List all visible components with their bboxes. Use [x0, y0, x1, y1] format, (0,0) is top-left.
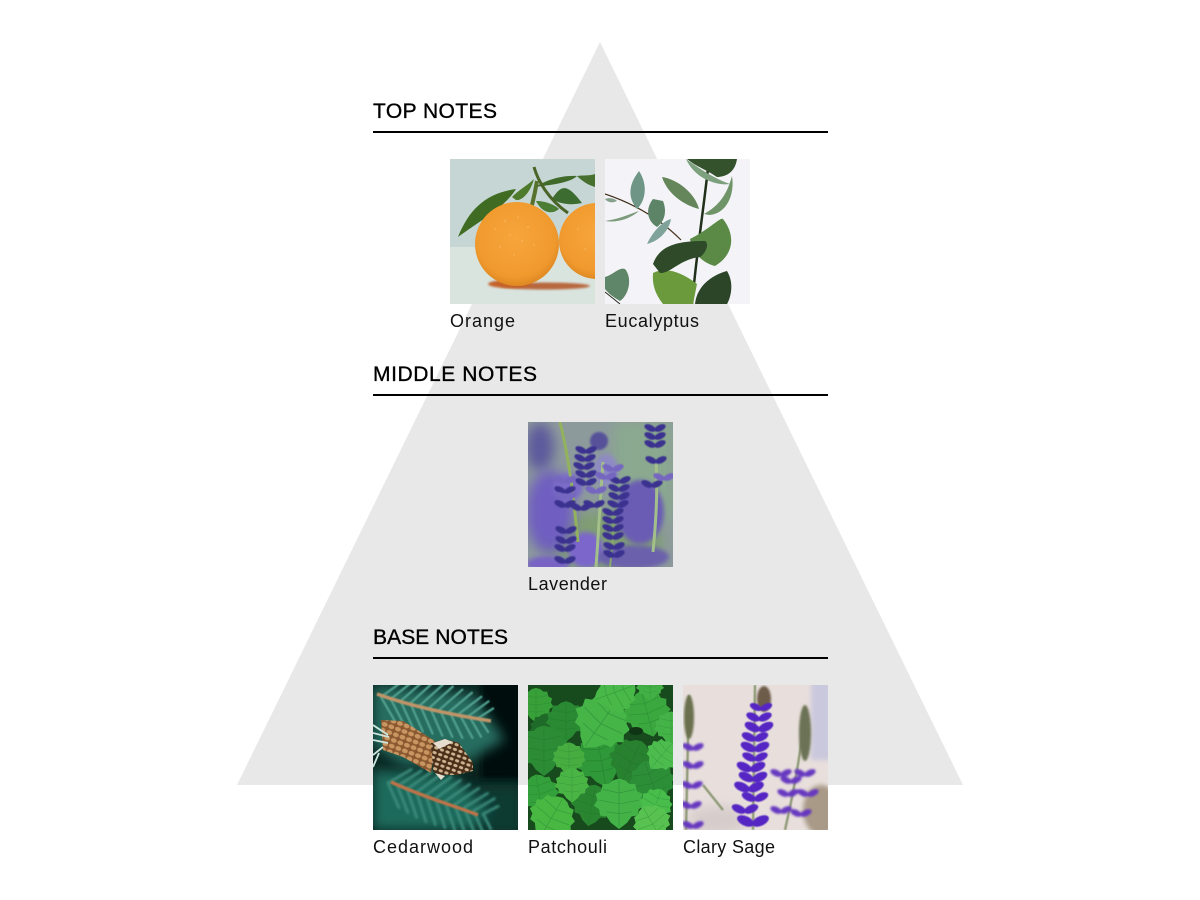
photo: patchouli	[528, 685, 673, 830]
background pyramid	[237, 42, 963, 785]
photo: clary sage	[683, 685, 828, 830]
heading: middle notes: MIDDLE NOTES	[373, 363, 537, 386]
label: eucalyptus: Eucalyptus	[605, 311, 699, 331]
label: cedarwood: Cedarwood	[373, 837, 473, 857]
photo: lavender	[526, 422, 676, 572]
photo: cedarwood	[373, 685, 518, 830]
photo: orange	[450, 159, 595, 304]
label: lavender: Lavender	[528, 574, 607, 594]
florets	[553, 423, 668, 565]
heading: base notes: BASE NOTES	[373, 626, 508, 649]
label: orange: Orange	[450, 311, 515, 331]
photo: eucalyptus	[605, 159, 750, 304]
heading: top notes: TOP NOTES	[373, 100, 497, 123]
label: clary sage: Clary Sage	[683, 837, 775, 857]
label: patchouli: Patchouli	[528, 837, 607, 857]
leaves	[458, 189, 516, 237]
